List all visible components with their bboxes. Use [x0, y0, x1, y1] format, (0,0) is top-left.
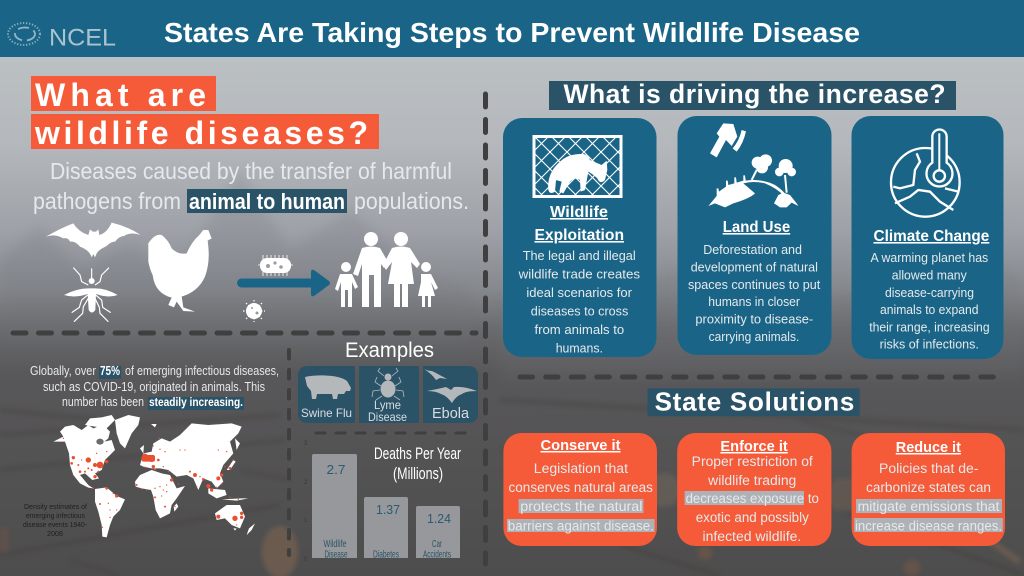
card body: their range, increasing: [869, 320, 990, 334]
solution body: conserves natural areas: [508, 480, 653, 495]
card body: risks of infections.: [880, 338, 979, 352]
solution body: protects the natural: [520, 499, 642, 514]
text block: global statistic: of emerging infectious diseases,: [125, 364, 279, 378]
example: swine flu: [298, 366, 355, 423]
solution body: [508, 461, 654, 534]
panel: example diseases: [298, 366, 478, 424]
chart axis labels: 2: [304, 480, 308, 486]
definition text: [33, 158, 469, 214]
card body: ideal scenarios for: [526, 285, 633, 300]
solution title: Reduce it: [896, 439, 961, 456]
example: lyme disease: Disease: [368, 410, 407, 424]
chart title: (Millions): [393, 464, 443, 483]
panel: climate change: [852, 116, 1004, 359]
icon: bacterium: [258, 255, 293, 276]
solution body: infected wildlife.: [702, 529, 801, 544]
map caption: emerging infectious: [26, 513, 85, 520]
title: States Are Taking Steps to Prevent Wildlife Disease: [164, 17, 860, 48]
definition text: pathogens from: [33, 188, 181, 214]
card body: [518, 248, 641, 356]
divider: horizontal dashes, right column: [520, 374, 994, 380]
solution title: Conserve it: [540, 437, 620, 454]
card body: wildlife trade creates: [518, 266, 641, 282]
text block: global statistic: [30, 364, 279, 410]
heading: state solutions: State Solutions: [655, 387, 854, 417]
heading: what are wildlife diseases: wildlife diseases?: [34, 115, 368, 151]
icon: virus: [243, 300, 265, 322]
card body: [869, 251, 990, 352]
heading: what are wildlife diseases: What are: [35, 77, 206, 113]
icon: caged animal: [534, 136, 621, 196]
card title: Climate Change: [874, 228, 989, 245]
bar: diabetes: Diabetes: [373, 550, 399, 560]
panel: wildlife exploitation: [503, 118, 656, 357]
card body: Deforestation and: [703, 243, 802, 257]
solution body: barriers against disease.: [508, 518, 654, 534]
example: swine flu: Swine Flu: [301, 406, 352, 420]
chart title: Deaths Per Year: [374, 444, 461, 463]
heading: examples: Examples: [345, 339, 434, 362]
arrow: animal to human: [242, 270, 330, 296]
solution body: mitigate emissions that: [858, 499, 1000, 514]
example: lyme disease: Lyme: [374, 398, 401, 412]
panel: land use: [678, 116, 832, 355]
text block: global statistic: steadily increasing.: [149, 395, 243, 409]
chart axis labels: 0: [304, 557, 308, 563]
icon: chicken: [148, 230, 212, 312]
solution body: increase disease ranges.: [855, 518, 1002, 534]
chart: deaths per year: [304, 441, 461, 563]
NCEL logo: NCEL: [49, 24, 116, 52]
bar: car accidents: [416, 506, 460, 560]
card body: [688, 243, 821, 344]
bar: car accidents: Accidents: [423, 550, 451, 560]
solution body: Policies that de-: [879, 461, 978, 476]
solution body: Legislation that: [534, 461, 628, 476]
panel: enforce it: [677, 433, 831, 546]
example: lyme disease: [359, 366, 419, 424]
solution body: exotic and possibly: [696, 510, 809, 525]
definition text: Diseases caused by the transfer of harmful: [50, 158, 452, 184]
card body: The legal and illegal: [523, 248, 636, 263]
card body: spaces continues to put: [688, 278, 821, 292]
bar: wildlife disease: 2.7: [326, 462, 346, 477]
map caption: [23, 504, 88, 538]
text block: global statistic: 75%: [100, 364, 120, 378]
heading: what are wildlife diseases: [31, 76, 379, 151]
divider: horizontal dashes, left column: [13, 330, 476, 336]
card title: Land Use: [723, 219, 790, 236]
solution body: Proper restriction of: [692, 454, 813, 469]
icon: bat: [46, 223, 141, 257]
card body: proximity to disease-: [695, 312, 813, 326]
NCEL logo: [8, 23, 116, 52]
card body: humans.: [556, 340, 603, 356]
world map with disease events: [53, 415, 255, 537]
panel: conserve it: [503, 433, 657, 546]
header banner: [0, 0, 1024, 57]
example: ebola: [423, 366, 478, 423]
chart axis labels: 3: [304, 441, 308, 447]
bar: wildlife disease: Disease: [324, 550, 348, 560]
card body: animals to expand: [880, 303, 979, 317]
solution title: Enforce it: [720, 438, 788, 455]
card body: allowed many: [892, 268, 967, 282]
icon: mosquito: [64, 268, 118, 322]
text block: global statistic: such as COVID-19, originated in animals. This: [43, 380, 265, 394]
bar: wildlife disease: [312, 454, 357, 560]
card body: A warming planet has: [870, 251, 988, 265]
divider: horizontal dashes under examples: [316, 432, 472, 434]
solution body: [686, 454, 819, 544]
example: ebola: Ebola: [432, 405, 470, 422]
bar: car accidents: Car: [432, 539, 442, 550]
map caption: 2008: [47, 531, 63, 538]
divider: vertical dashes, examples column: [287, 350, 291, 555]
card body: carrying animals.: [709, 330, 799, 344]
card title: Wildlife: [550, 204, 608, 221]
card body: development of natural: [691, 260, 818, 274]
chart title: [374, 444, 461, 483]
card body: disease-carrying: [885, 286, 974, 300]
icon: axe and trees: [708, 123, 798, 207]
solution body: decreases exposure to: [686, 491, 819, 506]
icon: globe and thermometer: [891, 129, 960, 217]
bar: diabetes: [364, 497, 408, 560]
card title: Exploitation: [534, 227, 624, 244]
definition text: populations.: [354, 188, 469, 214]
text block: global statistic: number has been: [62, 395, 144, 409]
solution body: [855, 461, 1002, 534]
heading: what is driving the increase: What is driving the increase?: [564, 79, 946, 109]
bar: wildlife disease: Wildlife: [324, 539, 347, 550]
icon: family: [335, 232, 438, 307]
definition text: animal to human: [189, 189, 345, 214]
divider: vertical dashes, centre column: [483, 94, 488, 564]
map caption: Density estimates of: [24, 504, 87, 511]
bar: car accidents: 1.24: [427, 511, 451, 526]
solution body: carbonize states can: [866, 480, 991, 495]
card title: [534, 204, 624, 244]
panel: reduce it: [852, 433, 1005, 546]
chart axis labels: 1: [304, 518, 308, 524]
card body: from animals to: [534, 322, 624, 337]
bar: diabetes: 1.37: [376, 502, 400, 517]
card body: diseases to cross: [531, 304, 629, 318]
solution body: wildlife trading: [707, 473, 796, 488]
chart axis labels: [304, 441, 308, 563]
card body: humans in closer: [708, 295, 800, 309]
text block: global statistic: Globally, over: [30, 364, 96, 378]
map caption: disease events 1940-: [23, 522, 88, 529]
